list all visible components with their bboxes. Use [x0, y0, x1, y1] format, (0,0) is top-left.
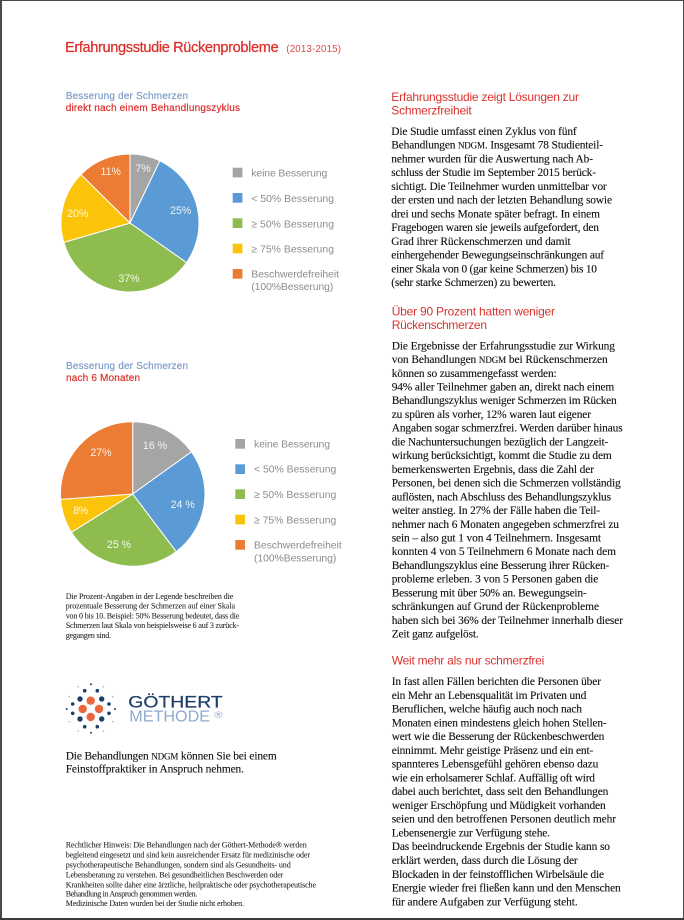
pie chart: nach 6 Monaten: 27%: [90, 447, 112, 459]
text block: study description: [391, 126, 612, 289]
legend: chart 2: (100%Besserung): [254, 553, 336, 564]
text block: results: Behandlungszyklus eine Besserung ihrer Rücken-: [392, 560, 610, 572]
text: treatment availability: Feinstoffpraktiker in Anspruch nehmen.: [66, 764, 244, 776]
pie chart: direkt nach Behandlungszyklus: 7%: [135, 163, 151, 175]
legend: chart 1: ≥ 75% Besserung: [251, 245, 334, 256]
text block: study description: nehmer wurden für die Auswertung nach Ab-: [391, 154, 593, 166]
legal notice: psychotherapeutische Behandlungen, sondern sind als Gesundheits- und: [66, 861, 291, 870]
logo: Göthert Methode: [66, 683, 223, 734]
heading: chart 1: Besserung der Schmerzen: [66, 91, 188, 102]
legal notice: Lebensberatung zu verstehen. Bei gesundheitlichen Beschwerden oder: [66, 870, 284, 879]
pie chart: direkt nach Behandlungszyklus: 20%: [67, 208, 89, 220]
heading: chart 2: nach 6 Monaten: [66, 373, 140, 384]
legend: chart 2: < 50% Besserung: [254, 465, 337, 476]
logo: Göthert Methode: GÖTHERT: [128, 694, 223, 712]
text block: study description: schluss der Studie im September 2015 berück-: [391, 167, 596, 179]
icon: dot burst: [66, 683, 116, 734]
logo: Göthert Methode: ®: [214, 710, 223, 721]
text block: further benefits: Das beeindruckende Ergebnis der Studie kann so: [392, 841, 610, 853]
text block: study description: Behandlungen NDGM. Insgesamt 78 Studienteil-: [391, 140, 603, 152]
pie chart: nach 6 Monaten: [60, 422, 205, 566]
text block: further benefits: seien und den betroffenen Personen deutlich mehr: [392, 814, 616, 826]
text block: study description: einer Skala von 0 (gar keine Schmerzen) bis 10: [391, 263, 597, 275]
legend: chart 1: keine Besserung: [251, 169, 328, 180]
text block: study description: drei und sechs Monate später befragt. In einem: [391, 208, 600, 220]
text block: results: weiter anstieg. In 27% der Fälle haben die Teil-: [392, 505, 600, 517]
text block: further benefits: Beruflichen, welche häufig auch noch nach: [392, 704, 582, 716]
heading: Über 90 Prozent: Rückenschmerzen: [392, 318, 487, 332]
legend note: Die Prozent-Angaben in der Legende beschreiben die: [66, 592, 234, 601]
text block: further benefits: Lebensenergie zur Verfügung stehe.: [392, 828, 550, 840]
pie chart: nach 6 Monaten: 25 %: [107, 539, 132, 551]
title: Erfahrungsstudie Rückenprobleme: [65, 40, 279, 56]
legend: chart 1: Beschwerdefreiheit: [251, 270, 339, 281]
heading: chart 2: Besserung der Schmerzen: [66, 361, 188, 372]
text block: further benefits: wie ein erholsamerer Schlaf. Auffällig oft wird: [392, 772, 595, 784]
legend note: [66, 592, 240, 640]
heading: chart 1: [66, 91, 240, 114]
text block: results: bemerkenswerten Ergebnis, dass die Zahl der: [392, 464, 594, 476]
heading: chart 1: direkt nach einem Behandlungszyklus: [66, 103, 240, 114]
text block: results: Behandlungszyklus weniger Schmerzen im Rücken: [392, 395, 617, 407]
text block: results: Angaben sogar schmerzfrei. Werden darüber hinaus: [392, 423, 623, 435]
text: treatment availability: Die Behandlungen NDGM können Sie bei einem: [66, 750, 277, 762]
text block: further benefits: Energie wieder frei fließen kann und den Menschen: [392, 882, 621, 894]
heading: Erfahrungsstudie zeigt Lösungen: Erfahrungsstudie zeigt Lösungen zur: [391, 90, 579, 104]
text block: further benefits: erklärt werden, dass durch die Lösung der: [392, 855, 578, 867]
legend: chart 1: ≥ 50% Besserung: [251, 219, 334, 230]
text block: results: nehmer nach 6 Monaten angegeben schmerzfrei zu: [392, 519, 619, 531]
legend: chart 2: [235, 439, 342, 564]
text block: further benefits: Monaten einen mindestens gleich hohen Stellen-: [392, 717, 607, 729]
text block: results: wirkung berücksichtigt, kommt die Studie zu dem: [392, 450, 612, 462]
text block: further benefits: einnimmt. Mehr geistige Präsenz und ein ent-: [392, 745, 594, 757]
text block: results: haben sich bei 36% der Teilnehmer innerhalb dieser: [392, 615, 623, 627]
text block: results: können so zusammengefasst werden:: [392, 368, 557, 380]
text block: results: auflösten, nach Abschluss des Behandlungszyklus: [392, 491, 612, 503]
pie chart: nach 6 Monaten: 24 %: [171, 499, 195, 511]
text block: study description: sichtigt. Die Teilnehmer wurden unmittelbar vor: [391, 181, 607, 193]
text block: results: Zeit ganz aufgelöst.: [392, 629, 479, 641]
legend: chart 2: ≥ 75% Besserung: [254, 515, 337, 526]
legal notice: Medizinische Daten wurden bei der Studie nicht erhoben.: [66, 899, 244, 908]
legal notice: Behandlung in Anspruch genommen werden.: [66, 890, 197, 899]
text: treatment availability: [66, 750, 277, 776]
text block: further benefits: dabei auch berichtet, dass seit den Behandlungen: [392, 786, 609, 798]
pie chart: nach 6 Monaten: 16 %: [143, 440, 168, 452]
legend: chart 2: keine Besserung: [254, 440, 330, 451]
logo: Göthert Methode: METHODE: [129, 709, 210, 726]
text block: results: 94% aller Teilnehmer gaben an, direkt nach einem: [392, 382, 614, 394]
text block: results: konnten 4 von 5 Teilnehmern 6 Monate nach dem: [392, 546, 616, 558]
legend note: prozentuale Besserung der Schmerzen auf einer Skala: [66, 602, 235, 611]
pie chart: direkt nach Behandlungszyklus: 25%: [170, 205, 192, 217]
legend note: von 0 bis 10. Beispiel: 50% Besserung bedeutet, dass die: [66, 612, 240, 620]
text block: results: Personen, bei denen sich die Schmerzen vollständig: [392, 478, 621, 490]
heading: Weit mehr als nur schmerzfrei: Weit mehr als nur schmerzfrei: [392, 653, 544, 667]
text block: results: sein – also gut 1 von 4 Teilnehmern. Insgesamt: [392, 532, 602, 544]
legend: chart 2: ≥ 50% Besserung: [254, 490, 337, 501]
text block: further benefits: spannteres Lebensgefühl gehören ebenso dazu: [392, 759, 599, 771]
text block: results: Besserung mit über 50% an. Bewegungsein-: [392, 587, 587, 599]
text block: results: die Nachuntersuchungen bezüglich der Langzeit-: [392, 436, 609, 448]
legal notice: Krankheiten sollte daher eine ärztliche, heilpraktische oder psychotherapeutische: [66, 880, 316, 889]
text block: study description: Die Studie umfasst einen Zyklus von fünf: [391, 126, 577, 138]
text block: results: [392, 340, 623, 641]
legend: chart 2: Beschwerdefreiheit: [254, 541, 342, 552]
legend: chart 1: (100%Besserung): [251, 282, 333, 293]
pie chart: direkt nach Behandlungszyklus: 37%: [118, 273, 140, 285]
legal notice: Rechtlicher Hinweis: Die Behandlungen nach der Göthert-Methode® werden: [66, 841, 307, 850]
legend note: gegangen sind.: [66, 631, 111, 640]
heading: Erfahrungsstudie zeigt Lösungen: [391, 90, 579, 118]
text block: study description: Grad ihrer Rückenschmerzen und damit: [391, 236, 572, 248]
legend: chart 1: [233, 168, 339, 293]
text block: results: schränkungen auf Grund der Rückenprobleme: [392, 601, 599, 613]
text block: further benefits: ein Mehr an Lebensqualität im Privaten und: [392, 690, 587, 702]
text block: further benefits: wert wie die Besserung der Rückenbeschwerden: [392, 731, 605, 743]
text block: further benefits: [392, 676, 621, 908]
heading: Über 90 Prozent: Über 90 Prozent hatten weniger: [392, 304, 555, 318]
heading: Über 90 Prozent: [392, 304, 555, 332]
pie chart: direkt nach Behandlungszyklus: [61, 154, 199, 292]
text block: results: Die Ergebnisse der Erfahrungsstudie zur Wirkung: [392, 340, 615, 352]
text block: study description: Fragebogen waren sie jeweils aufgefordert, den: [391, 222, 599, 234]
text block: study description: einhergehender Bewegungseinschränkungen auf: [391, 250, 604, 262]
pie chart: nach 6 Monaten: 8 %: [73, 505, 89, 517]
legal notice: [66, 841, 316, 908]
text block: study description: der ersten und nach der letzten Behandlung sowie: [391, 195, 612, 207]
title: (2013-2015): [286, 44, 341, 55]
text block: results: von Behandlungen NDGM bei Rückenschmerzen: [392, 354, 608, 366]
text block: results: zu spüren als vorher, 12% waren laut eigener: [392, 409, 591, 421]
text block: study description: (sehr starke Schmerzen) zu bewerten.: [391, 277, 556, 289]
heading: chart 2: [66, 361, 188, 384]
text block: further benefits: weniger Erschöpfung und Müdigkeit vorhanden: [392, 800, 606, 812]
legal notice: begleitend eingesetzt und sind kein ausreichender Ersatz für medizinische oder: [66, 851, 310, 860]
text block: further benefits: In fast allen Fällen berichten die Personen über: [392, 676, 601, 688]
heading: Erfahrungsstudie zeigt Lösungen: Schmerzfreiheit: [391, 104, 472, 118]
text block: further benefits: Blockaden in der feinstofflichen Wirbelsäule die: [392, 869, 604, 881]
text block: further benefits: für andere Aufgaben zur Verfügung steht.: [392, 896, 578, 908]
text block: results: probleme erleben. 3 von 5 Personen gaben die: [392, 574, 598, 586]
pie chart: direkt nach Behandlungszyklus: 11%: [100, 166, 121, 178]
legend: chart 1: < 50% Besserung: [251, 194, 334, 205]
legend note: Schmerzen laut Skala von beispielsweise 6 auf 3 zurück-: [66, 621, 239, 630]
